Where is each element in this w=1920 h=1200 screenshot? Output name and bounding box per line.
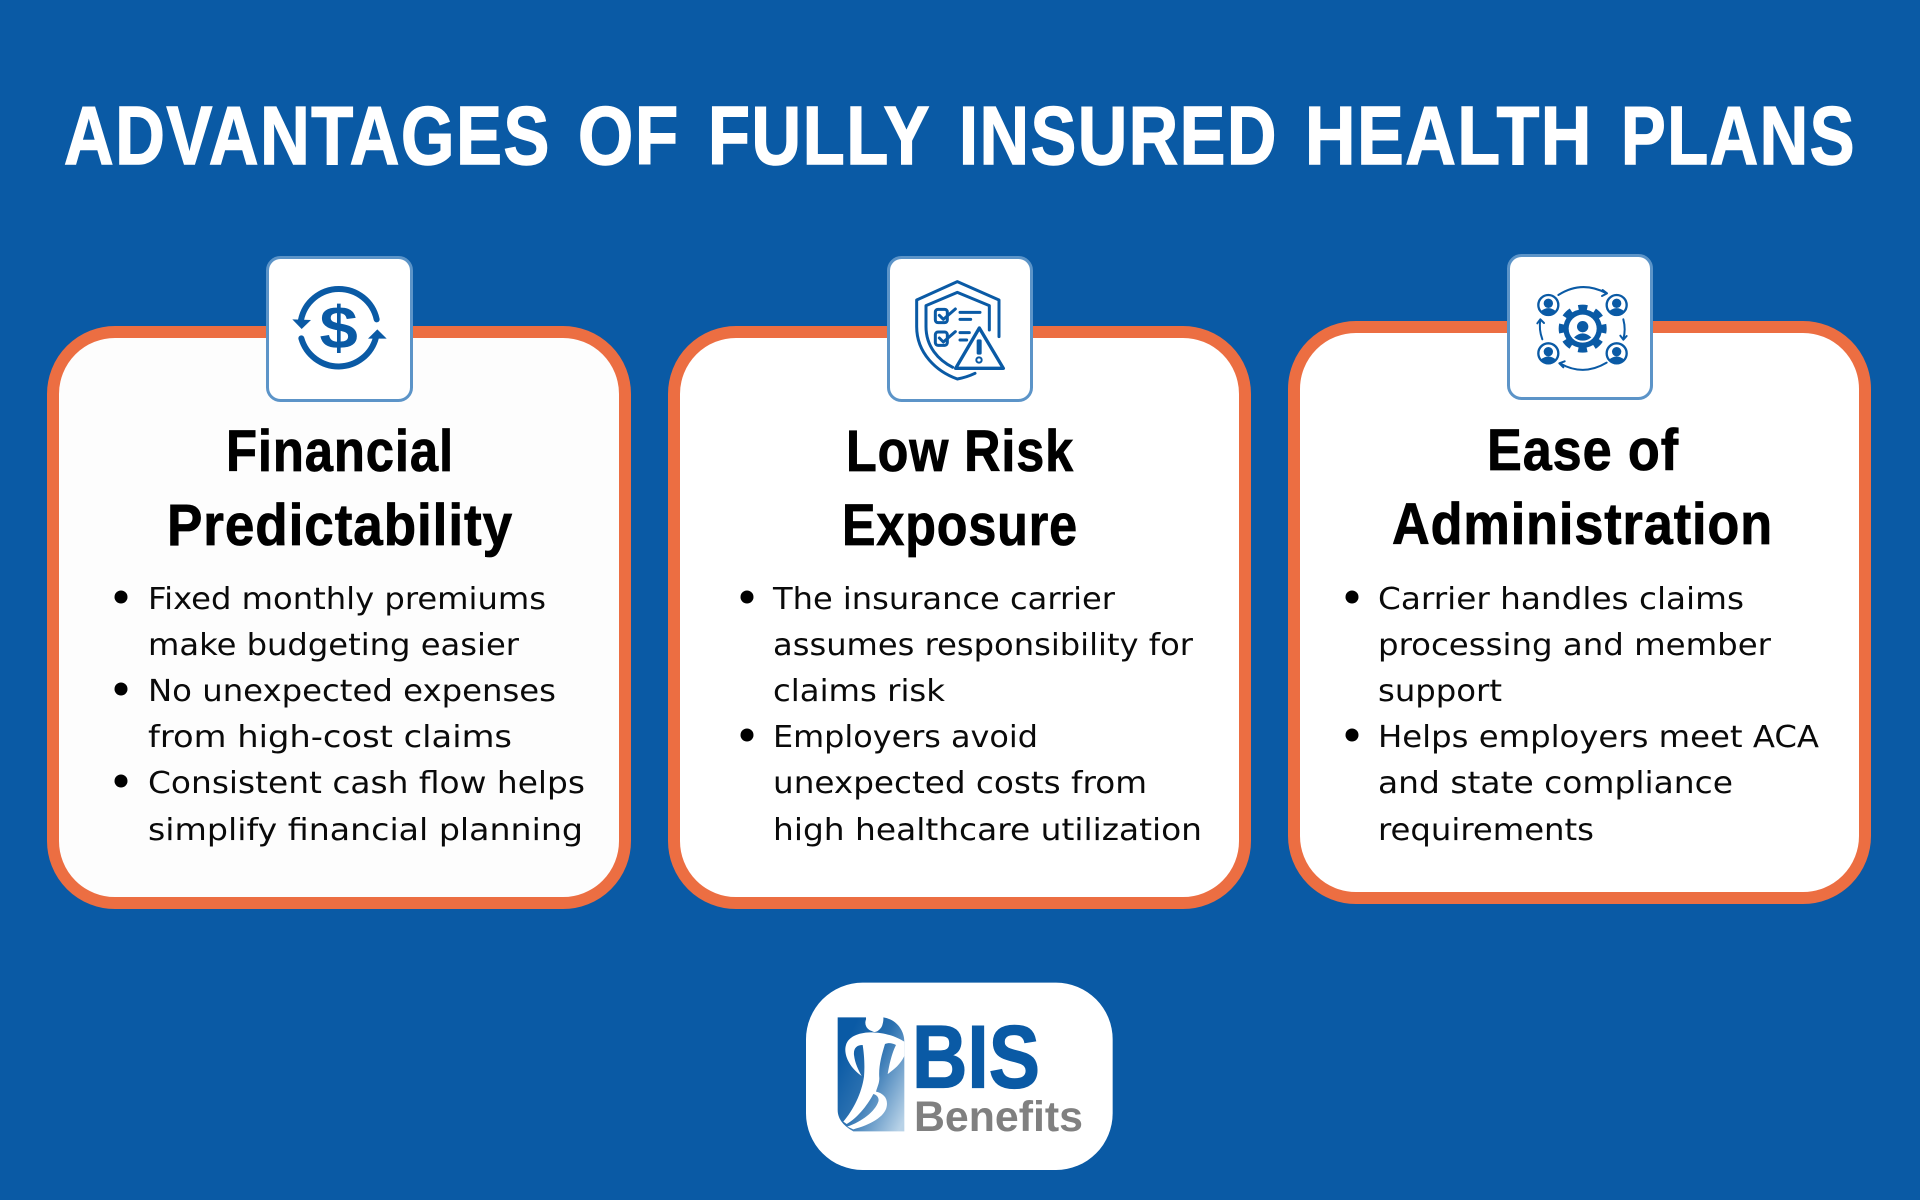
logo wordmark <box>912 1006 1083 1141</box>
icon: dollar cycle <box>268 258 412 400</box>
panel: financial predictability <box>53 258 625 903</box>
icon: dollar cycle: $ <box>319 294 358 361</box>
bullet list: processing and member <box>1378 628 1772 663</box>
heading: Ease of <box>1487 418 1679 483</box>
card frame <box>53 332 625 903</box>
bullet list: Fixed monthly premiums <box>148 582 546 617</box>
icon: runner shield <box>838 1014 904 1131</box>
bullet list: make budgeting easier <box>148 628 520 663</box>
logo wordmark: Benefits <box>914 1093 1083 1141</box>
title: PLANS <box>1621 89 1856 182</box>
heading <box>1392 418 1773 557</box>
logo: BIS Benefits <box>806 983 1113 1170</box>
title: ADVANTAGES <box>64 89 551 182</box>
bullet list: Carrier handles claims <box>1378 582 1744 617</box>
title: FULLY <box>708 89 931 182</box>
bullet list: assumes responsibility for <box>773 628 1194 663</box>
bullet list: requirements <box>1378 813 1594 848</box>
bullet list: Consistent cash flow helps <box>148 766 585 801</box>
heading: Administration <box>1392 492 1773 557</box>
heading: Low Risk <box>846 419 1074 484</box>
card frame <box>1294 327 1865 898</box>
panel: low risk exposure <box>674 258 1245 903</box>
bullet list: claims risk <box>773 674 946 709</box>
bullet list: Helps employers meet ACA <box>1378 720 1820 755</box>
bullet list: unexpected costs from <box>773 766 1147 801</box>
title: HEALTH <box>1305 89 1593 182</box>
heading <box>842 419 1078 558</box>
heading: Exposure <box>842 493 1078 558</box>
icon: people and gear <box>1508 256 1652 398</box>
bullet list <box>740 582 1202 848</box>
bullet list <box>114 582 585 848</box>
heading <box>167 419 513 558</box>
bullet list: Employers avoid <box>773 720 1038 755</box>
panel: ease of administration <box>1294 256 1865 898</box>
bullet list <box>1346 582 1820 848</box>
title <box>64 89 1856 182</box>
logo wordmark: BIS <box>912 1006 1040 1106</box>
bullet list: from high-cost claims <box>148 720 512 755</box>
title: INSURED <box>959 89 1278 182</box>
bullet list: support <box>1378 674 1502 709</box>
heading: Predictability <box>167 493 513 558</box>
bullet list: high healthcare utilization <box>773 813 1202 848</box>
card frame <box>674 332 1245 903</box>
title: OF <box>578 89 680 182</box>
bullet list: The insurance carrier <box>772 582 1116 617</box>
bullet list: simplify financial planning <box>148 813 583 848</box>
heading: Financial <box>226 419 454 484</box>
bullet list: No unexpected expenses <box>148 674 556 709</box>
icon: shield checklist warning <box>888 258 1032 400</box>
bullet list: and state compliance <box>1378 766 1733 801</box>
